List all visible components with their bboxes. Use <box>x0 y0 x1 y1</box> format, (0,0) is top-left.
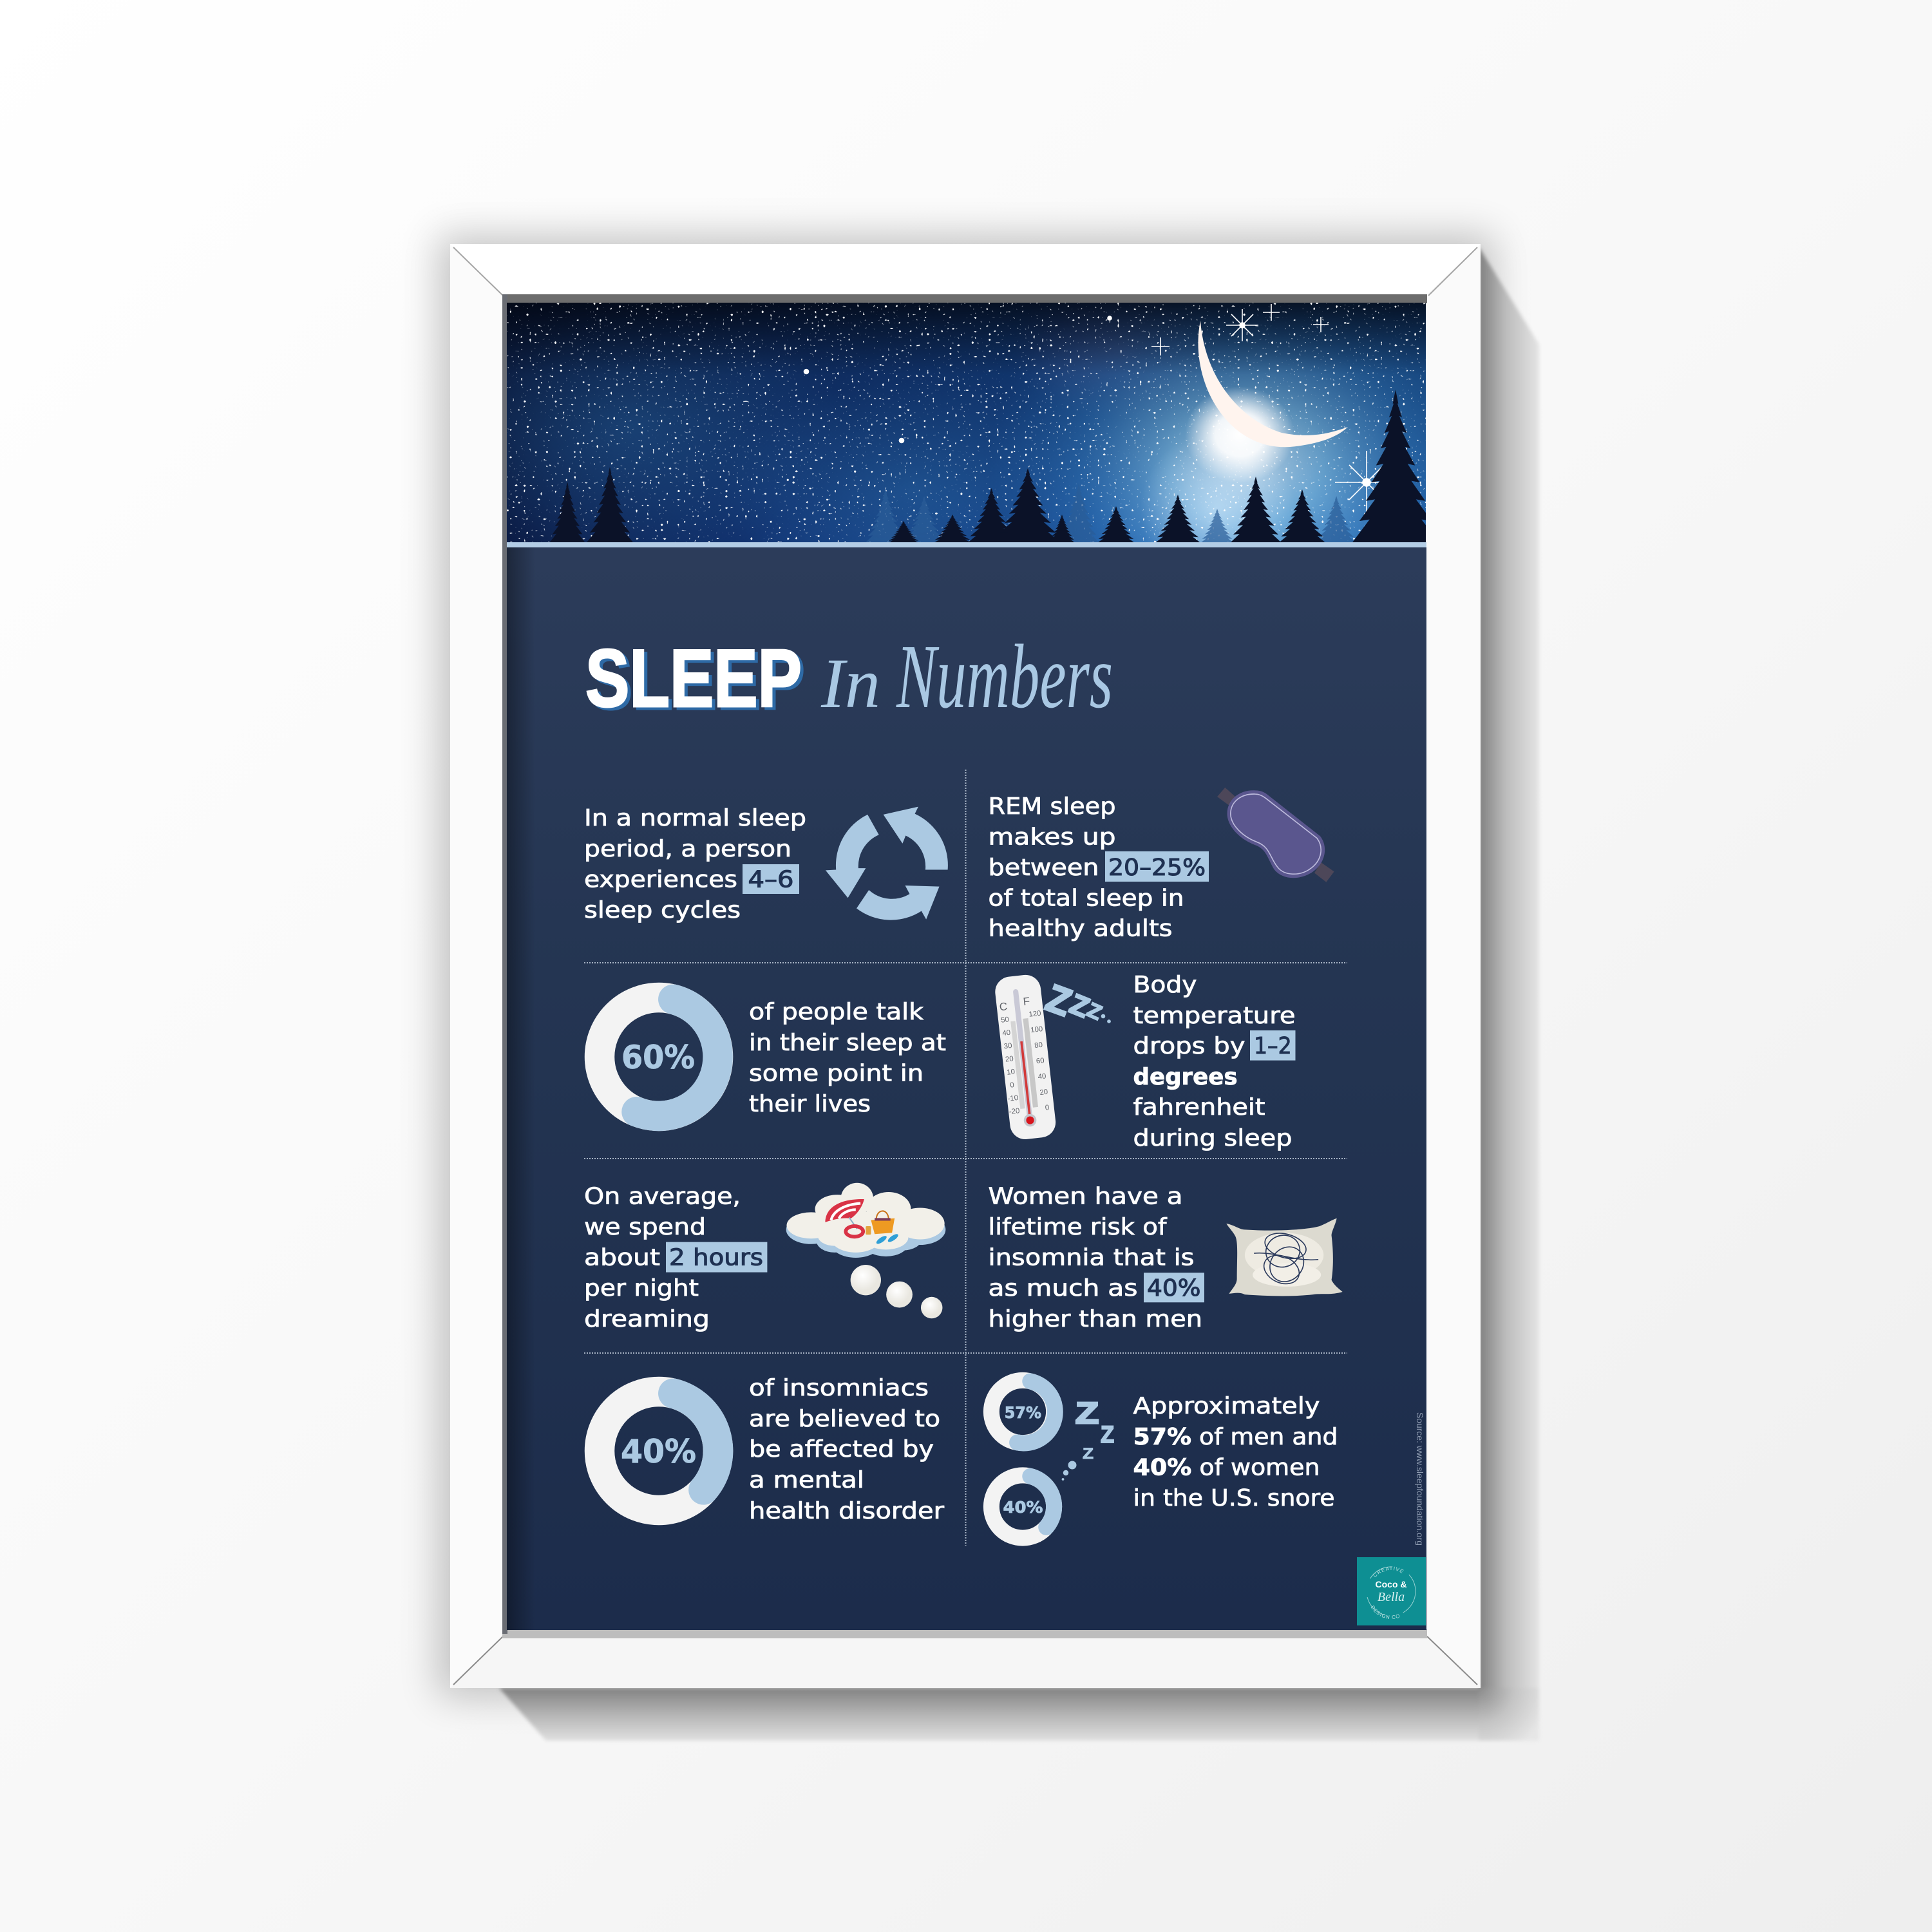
panel: insomnia text <box>988 1183 1204 1332</box>
panel: REM sleep text: 20–25% <box>1108 855 1206 881</box>
text: snoring stats: in the U.S. snore <box>1133 1485 1334 1511</box>
panel: REM sleep text <box>988 793 1209 942</box>
beach umbrella <box>825 1199 864 1229</box>
donut chart: 40% women <box>991 1475 1054 1538</box>
panel: snoring <box>991 1380 1338 1538</box>
swim ring <box>846 1226 863 1236</box>
thought bubbles <box>851 1265 942 1318</box>
poster background panel <box>507 542 1426 1630</box>
icon: thermometer: -10 <box>1007 1094 1019 1103</box>
panel: sleep cycles text: 4–6 <box>748 867 793 893</box>
panel: dreaming text: 2 hours <box>669 1244 763 1271</box>
icon: thermometer: 50 <box>1001 1016 1010 1025</box>
text: snoring stats: Approximately <box>1133 1393 1320 1419</box>
banner divider strip <box>507 542 1426 547</box>
panel: sleep cycles text: In a normal sleep <box>584 805 806 831</box>
panel: sleep cycles text <box>584 805 806 923</box>
text: insomniacs: be affected by <box>749 1436 934 1463</box>
panel: body temperature text: drops by <box>1133 1033 1245 1059</box>
icon: Zzz beside thermometer: Z <box>1041 976 1077 1025</box>
panel: sleep cycles text: period, a person <box>584 836 791 862</box>
text: insomniacs: a mental <box>749 1467 864 1493</box>
panel: body temperature text: Body <box>1133 972 1197 998</box>
title <box>585 625 1113 727</box>
crescent moon <box>1198 321 1348 447</box>
bottle <box>866 1226 871 1235</box>
text: talk in sleep: some point in <box>749 1061 923 1087</box>
donut chart: 60% <box>600 998 718 1116</box>
icon: snoring Zs: Z <box>1083 1445 1094 1463</box>
panel: REM sleep text: makes up <box>988 824 1115 850</box>
title word: SLEEP: SLEEP <box>585 632 802 724</box>
icon: snoring Zs <box>1062 1396 1114 1480</box>
icon: thermometer: 30 <box>1003 1042 1012 1050</box>
donut chart: 57% men: 57% <box>1005 1403 1041 1422</box>
logo badge: Coco & <box>1376 1579 1406 1589</box>
panel: insomnia text: Women have a <box>988 1183 1182 1209</box>
icon: thermometer: 0 <box>1045 1104 1050 1112</box>
panel: insomnia text: insomnia that is <box>988 1244 1194 1271</box>
frame cast shadow <box>496 245 1539 1741</box>
source note: Source: www.sleepfoundation.org <box>1415 1412 1425 1546</box>
panel: dreaming text: On average, <box>584 1183 741 1209</box>
text: insomniacs <box>749 1375 944 1524</box>
text: talk in sleep: their lives <box>749 1091 871 1117</box>
logo badge <box>1357 1557 1426 1625</box>
grid dividers <box>584 770 1347 1546</box>
panel: body temperature text: fahrenheit <box>1133 1094 1265 1121</box>
picture frame <box>450 244 1481 1688</box>
panel: insomnia text: lifetime risk of <box>988 1214 1168 1240</box>
icon: snoring Zs: Z <box>1101 1421 1114 1448</box>
panel: body temperature text: degrees <box>1133 1064 1238 1090</box>
icon: sleep mask <box>1217 788 1334 882</box>
frame soft ambient shadow <box>438 235 1494 1697</box>
flip flops <box>875 1233 900 1245</box>
title words: In Numbers: In <box>820 644 880 723</box>
donut chart: 40% women: 40% <box>1003 1498 1043 1517</box>
panel: dreaming text <box>584 1183 767 1332</box>
night sky banner with moon and trees <box>507 303 1426 542</box>
panel: sleep cycles text: sleep cycles <box>584 897 741 923</box>
icon: dream cloud with beach items <box>786 1183 945 1318</box>
text: talk in sleep: of people talk <box>749 999 923 1025</box>
title words: In Numbers <box>820 625 1113 727</box>
panel: dreaming text: about <box>584 1244 660 1271</box>
icon: cycle arrows <box>826 807 948 920</box>
logo badge: DESIGN CO <box>1370 1605 1400 1619</box>
text: insomniacs: are believed to <box>749 1406 940 1432</box>
icon: thermometer: C <box>999 999 1008 1014</box>
icon: thermometer: 10 <box>1007 1068 1016 1077</box>
panel: 60% talk in sleep <box>600 998 946 1117</box>
panel: dreaming text: per night <box>584 1275 699 1302</box>
donut chart: 60%: 60% <box>621 1039 695 1076</box>
panel: REM sleep text: healthy adults <box>988 916 1172 942</box>
donut chart: 40%: 40% <box>621 1433 696 1470</box>
beach bag <box>871 1211 895 1234</box>
panel: dreaming text: dreaming <box>584 1306 710 1332</box>
panel: REM sleep text: REM sleep <box>988 793 1115 820</box>
panel: REM sleep text: of total sleep in <box>988 885 1184 912</box>
icon: thermometer: 60 <box>1036 1057 1045 1065</box>
panel: body temperature text: temperature <box>1133 1003 1296 1029</box>
panel: insomnia text: as much as <box>988 1275 1137 1302</box>
text: snoring stats <box>1133 1393 1338 1511</box>
panel: dreaming text: we spend <box>584 1214 706 1240</box>
icon: Zzz beside thermometer: Z <box>1065 988 1094 1024</box>
panel: REM sleep text: between <box>988 855 1099 881</box>
panel: body temperature text: 1–2 <box>1254 1033 1292 1059</box>
icon: thermometer: 0 <box>1010 1081 1014 1090</box>
logo badge: CREATIVE <box>1373 1566 1404 1577</box>
panel: sleep cycles text: experiences <box>584 867 737 893</box>
icon: Zzz beside thermometer <box>1041 976 1110 1025</box>
icon: thermometer: 20 <box>1039 1088 1048 1097</box>
icon: thermometer: 40 <box>1037 1072 1046 1081</box>
title words: In Numbers: Numbers <box>896 625 1113 727</box>
panel: insomnia text: 40% <box>1147 1275 1200 1302</box>
icon: thermometer: 80 <box>1034 1041 1043 1050</box>
sparkling stars <box>804 304 1398 514</box>
donut chart: 40% <box>600 1392 718 1510</box>
panel: 40% insomniacs <box>600 1375 944 1524</box>
panel: body temperature text <box>1133 972 1296 1151</box>
icon: thermometer: 120 <box>1028 1010 1041 1019</box>
icon: thermometer: 100 <box>1030 1025 1043 1034</box>
donut chart: 57% men <box>991 1380 1055 1443</box>
icon: thermometer: 40 <box>1002 1029 1011 1037</box>
icon: thermometer: 20 <box>1005 1055 1014 1064</box>
faded tree line <box>866 489 1354 542</box>
text: snoring stats: 40% of women <box>1133 1455 1320 1481</box>
text: insomniacs: health disorder <box>749 1498 944 1524</box>
panel: insomnia text: higher than men <box>988 1306 1202 1332</box>
logo badge: Bella <box>1378 1590 1405 1604</box>
icon: thermometer: -20 <box>1009 1107 1020 1116</box>
dark tree silhouettes <box>549 390 1440 545</box>
icon: thermometer: F <box>1023 994 1030 1008</box>
icon: pillow with scribble <box>1226 1218 1343 1296</box>
icon: thermometer <box>994 973 1057 1141</box>
title word: SLEEP: SLEEP <box>589 635 805 726</box>
text: talk in sleep: in their sleep at <box>749 1030 946 1056</box>
icon: snoring Zs: Z <box>1075 1396 1099 1430</box>
panel: body temperature text: during sleep <box>1133 1125 1292 1151</box>
text: snoring stats: 57% of men and <box>1133 1424 1338 1450</box>
icon: Zzz beside thermometer: Z <box>1084 998 1106 1025</box>
text: insomniacs: of insomniacs <box>749 1375 929 1401</box>
text: talk in sleep <box>749 999 946 1117</box>
